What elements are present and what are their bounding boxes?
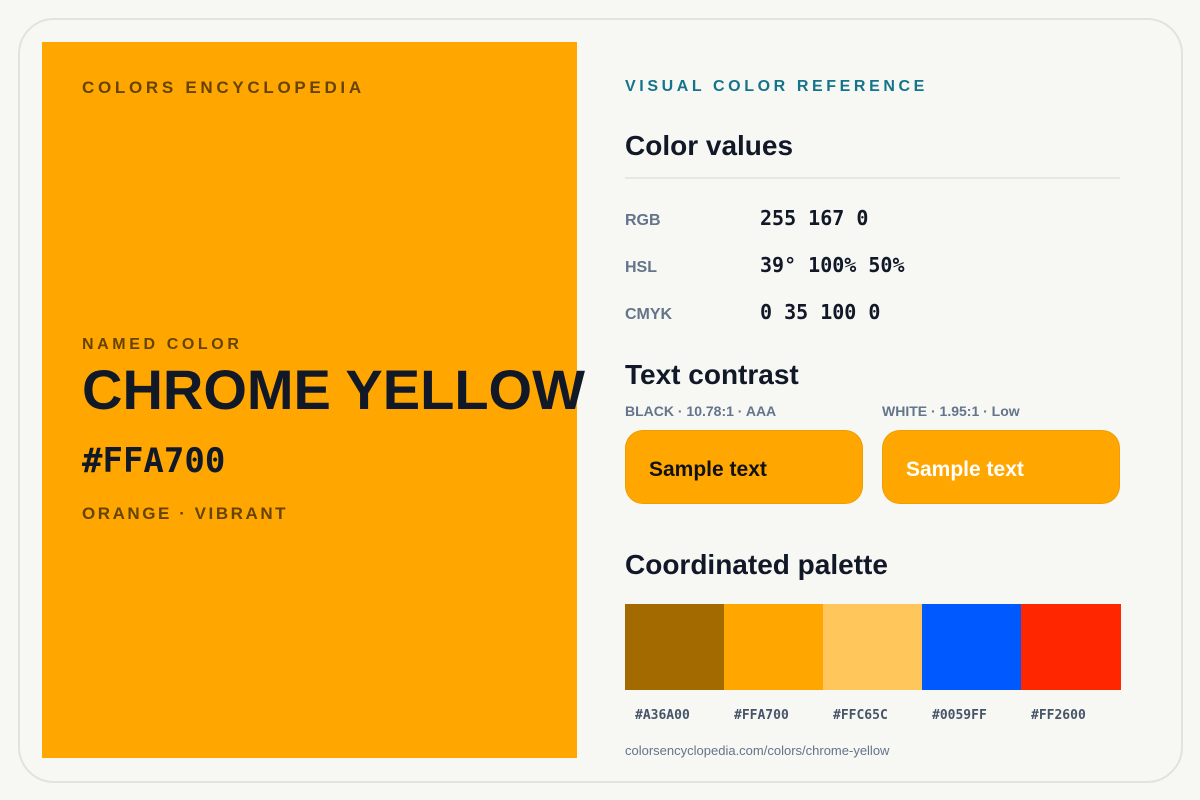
RGB value: 255 167 0: [760, 206, 868, 230]
brand label: COLORS ENCYCLOPEDIA: [82, 78, 365, 97]
color values table: [625, 206, 904, 324]
black contrast label: BLACK · 10.78:1 · AAA: [625, 403, 776, 419]
RGB row: RGB: [625, 212, 661, 229]
black sample box: [625, 430, 863, 504]
swatch FF2600: [1021, 604, 1121, 690]
white sample text: Sample text: [906, 458, 1024, 481]
source url: colorsencyclopedia.com/colors/chrome-yellow: [625, 743, 889, 758]
swatch label FFA700: #FFA700: [734, 708, 789, 723]
heading: color values: Color values: [625, 130, 793, 161]
panel: color hero: [42, 42, 577, 758]
swatch FFC65C: [823, 604, 922, 690]
HSL row: HSL: [625, 259, 657, 276]
white contrast label: WHITE · 1.95:1 · Low: [882, 403, 1020, 419]
swatch A36A00: [625, 604, 724, 690]
heading: text contrast: Text contrast: [625, 359, 799, 390]
values divider: [625, 177, 1120, 179]
swatch label FF2600: #FF2600: [1031, 708, 1086, 723]
swatch 0059FF: [922, 604, 1021, 690]
CMYK row: CMYK: [625, 306, 672, 323]
color family tags: ORANGE · VIBRANT: [82, 504, 288, 523]
black sample text: Sample text: [649, 458, 767, 481]
swatch label 0059FF: #0059FF: [932, 708, 987, 723]
white sample box: [882, 430, 1120, 504]
palette swatches: [625, 604, 1121, 690]
section eyebrow: VISUAL COLOR REFERENCE: [625, 78, 928, 95]
CMYK value: 0 35 100 0: [760, 300, 880, 324]
title: color name: CHROME YELLOW: [82, 358, 585, 421]
swatch label FFC65C: #FFC65C: [833, 708, 888, 723]
hex code: #FFA700: [82, 441, 225, 481]
swatch FFA700: [724, 604, 823, 690]
HSL value: 39° 100% 50%: [760, 253, 904, 277]
heading: coordinated palette: Coordinated palette: [625, 549, 888, 580]
swatch label A36A00: #A36A00: [635, 708, 690, 723]
eyebrow: named color: NAMED COLOR: [82, 336, 242, 353]
